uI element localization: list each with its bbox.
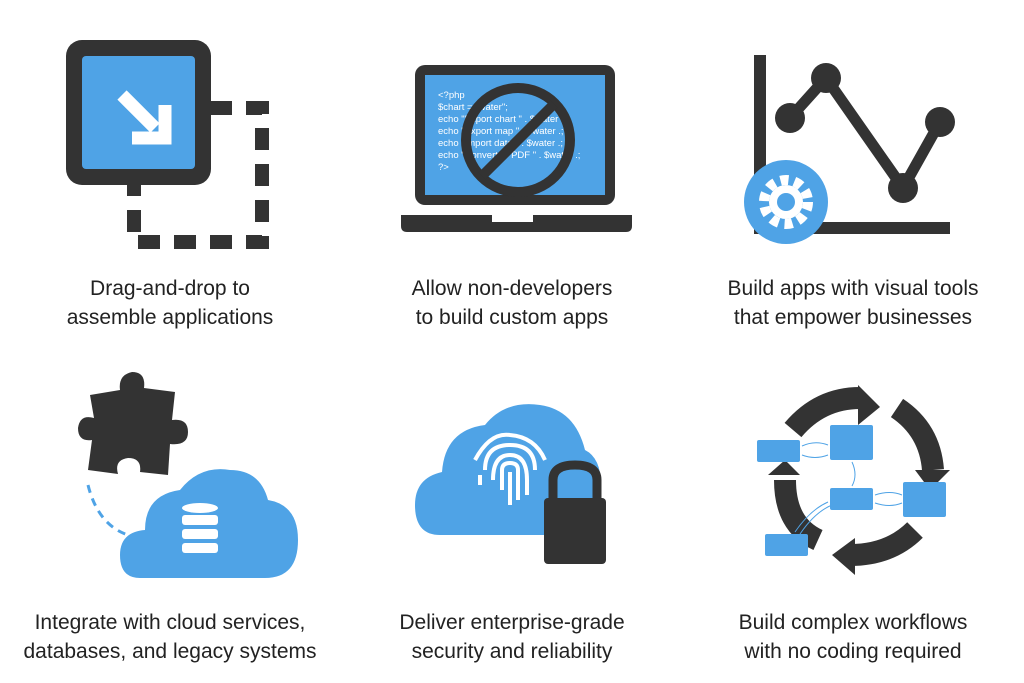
icon: laptop with no code: echo "Convert to PDF " . $water .; — [438, 150, 580, 161]
text: workflows: with no coding required — [744, 640, 962, 663]
text: non-developers — [412, 277, 612, 329]
text: security: Deliver enterprise-grade — [399, 611, 625, 634]
text: workflows: Build complex workflows — [739, 611, 967, 634]
text: drag and drop — [67, 277, 273, 329]
text: drag and drop: assemble applications — [67, 306, 273, 329]
text: integrate: databases, and legacy systems — [24, 640, 316, 663]
icon: laptop with no code — [401, 65, 632, 232]
icon: laptop with no code: <?php — [438, 90, 465, 101]
icon: laptop with no code: ?> — [438, 162, 449, 173]
icon: chart with gear — [744, 55, 955, 244]
text: non-developers: Allow non-developers — [412, 277, 612, 300]
text: visual tools — [728, 277, 978, 329]
text: security: security and reliability — [412, 640, 612, 663]
text: drag and drop: Drag-and-drop to — [90, 277, 250, 300]
icon: cloud integration — [78, 372, 298, 578]
icon: workflow cycle — [757, 385, 950, 575]
icon: laptop with no code: echo "Import data " . $water .; — [438, 138, 563, 149]
text: workflows — [739, 611, 967, 663]
text: visual tools: Build apps with visual tools — [728, 277, 978, 300]
text: non-developers: to build custom apps — [416, 306, 608, 329]
text: visual tools: that empower businesses — [734, 306, 972, 329]
text: integrate — [24, 611, 316, 663]
icon: laptop with no code: echo "Export chart " . $water .; — [438, 114, 566, 125]
icon: laptop with no code: echo "Export map " . $water .; — [438, 126, 564, 137]
text: security — [399, 611, 625, 663]
icon: laptop with no code: $chart = "water"; — [438, 102, 508, 113]
icon: drag and drop — [66, 40, 262, 242]
icon: security cloud — [415, 404, 606, 564]
text: integrate: Integrate with cloud services, — [35, 611, 305, 634]
